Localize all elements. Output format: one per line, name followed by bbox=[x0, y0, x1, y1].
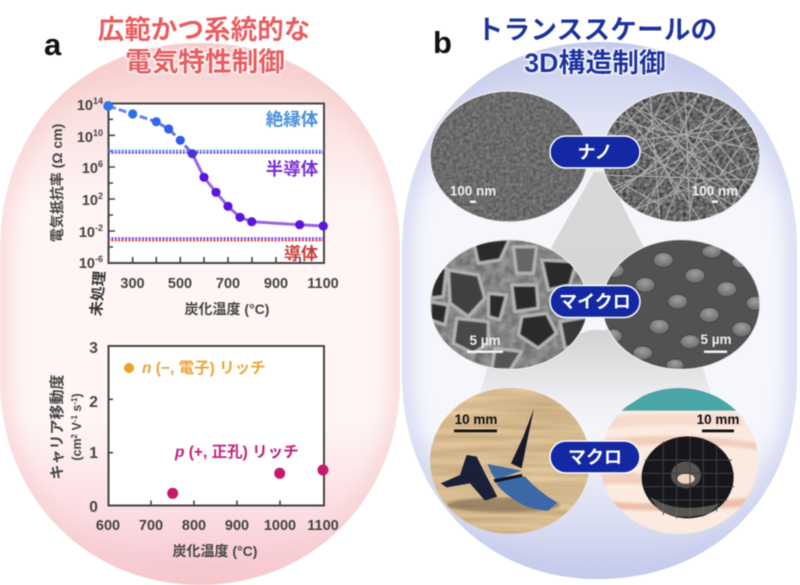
chart: carrier mobility vs carbonization temperature bbox=[48, 340, 339, 559]
x axis title: 炭化温度 (°C) bbox=[185, 301, 269, 317]
x axis tick labels: 800 bbox=[182, 518, 206, 534]
title: panel a: 電気特性制御 bbox=[125, 47, 285, 77]
title: panel b: トランススケールの bbox=[477, 15, 717, 45]
label pill: micro: マイクロ bbox=[559, 292, 631, 312]
label pill: micro bbox=[550, 286, 640, 318]
scale bar bbox=[712, 200, 718, 203]
y axis tick labels: 10 bbox=[77, 130, 93, 146]
y axis tick labels: 10 bbox=[82, 161, 98, 177]
funnel: nano to micro connector bbox=[552, 172, 645, 300]
y axis tick labels: 0 bbox=[89, 499, 98, 516]
data series: resistivity bbox=[103, 101, 328, 231]
image: micro, dimpled surface bbox=[604, 239, 760, 370]
image: micro, porous scaffold bbox=[430, 239, 586, 370]
y axis title: -1 bbox=[70, 397, 79, 405]
data point and legend: n-rich: n (−, 電子) リッチ bbox=[142, 359, 266, 377]
y axis title: -1 bbox=[70, 415, 79, 422]
x axis tick labels bbox=[120, 276, 339, 292]
x axis tick labels: 700 bbox=[216, 276, 240, 292]
x axis tick labels: 1100 bbox=[307, 276, 339, 292]
y axis tick labels: 10 bbox=[82, 193, 98, 209]
y axis title: 電気抵抗率 (Ω cm) bbox=[49, 124, 65, 242]
image: macro, origami crane bbox=[428, 386, 593, 536]
x axis tick labels bbox=[96, 518, 339, 534]
x axis tick labels: 900 bbox=[264, 276, 288, 292]
y axis title bbox=[48, 374, 84, 480]
x axis tick labels: 1000 bbox=[264, 518, 296, 534]
y axis tick labels: 10 bbox=[93, 128, 103, 138]
scale bar bbox=[467, 350, 503, 353]
panel a background: pink rounded shape bbox=[0, 40, 402, 585]
y axis title: V bbox=[70, 422, 84, 434]
y axis tick labels: 10 bbox=[79, 225, 95, 241]
data points and legend: p-rich bbox=[167, 443, 328, 499]
scale label: 10 mm: 10 mm bbox=[697, 412, 739, 427]
y axis tick labels: 10 bbox=[79, 256, 95, 272]
threshold line: semiconductor / conductor bbox=[108, 238, 324, 240]
x tick label: untreated: 未処理 bbox=[87, 270, 109, 317]
panel b background: blue rounded shape bbox=[400, 40, 800, 580]
x axis tick labels: 900 bbox=[225, 518, 249, 534]
label pill: nano bbox=[550, 136, 640, 168]
panel label b: b bbox=[433, 25, 452, 60]
threshold line: insulator / semiconductor bbox=[108, 151, 324, 153]
scale bar bbox=[454, 430, 497, 432]
y axis tick labels: 6 bbox=[98, 159, 103, 169]
image: nano, fibrous network bbox=[603, 90, 760, 222]
scale bar bbox=[704, 350, 727, 353]
image: nano, dense surface bbox=[430, 90, 587, 222]
scale bar bbox=[702, 430, 734, 432]
scale bar bbox=[470, 200, 476, 203]
plot frame and ticks bbox=[108, 346, 324, 506]
label pill: macro bbox=[550, 441, 640, 473]
y axis title: 2 bbox=[70, 433, 79, 438]
x axis title: 炭化温度 (°C) bbox=[173, 543, 257, 559]
data points and legend: p-rich: p (+, 正孔) リッチ bbox=[174, 443, 299, 461]
panel label a: a bbox=[44, 27, 62, 62]
region label: conductor: 導体 bbox=[284, 244, 318, 264]
y axis title: ) bbox=[70, 393, 84, 397]
title: panel a: 広範かつ系統的な bbox=[98, 15, 310, 45]
y axis title: (cm bbox=[70, 438, 84, 461]
y axis tick labels: 2 bbox=[98, 191, 103, 201]
scale label: 10 mm: 10 mm bbox=[455, 412, 497, 427]
label pill: nano: ナノ bbox=[577, 142, 613, 162]
image: macro, carbon ring on fingers bbox=[598, 386, 760, 536]
x axis tick labels: 500 bbox=[168, 276, 192, 292]
y axis tick labels: 14 bbox=[93, 96, 103, 106]
title: panel a bbox=[98, 15, 310, 77]
scale label: 5 µm: 5 µm bbox=[469, 333, 501, 348]
region label: semiconductor: 半導体 bbox=[266, 159, 319, 179]
y axis title: s bbox=[70, 405, 84, 415]
scale label: 5 µm: 5 µm bbox=[700, 332, 732, 347]
x axis tick labels: 700 bbox=[139, 518, 163, 534]
y axis tick labels: -6 bbox=[95, 254, 103, 264]
y axis tick labels: 2 bbox=[89, 394, 98, 411]
title: panel b bbox=[477, 15, 717, 78]
y axis tick labels: 1 bbox=[89, 445, 98, 462]
x axis tick labels: 1100 bbox=[307, 518, 339, 534]
y axis tick labels: 3 bbox=[89, 340, 98, 357]
x axis tick labels: 300 bbox=[120, 276, 145, 292]
title: panel b: 3D構造制御 bbox=[524, 48, 666, 78]
y axis tick labels: -2 bbox=[95, 223, 103, 233]
region label: insulator: 絶縁体 bbox=[266, 110, 319, 130]
x axis tick labels: 600 bbox=[96, 518, 120, 534]
y axis tick labels bbox=[77, 96, 103, 272]
funnel: micro to macro connector bbox=[470, 330, 722, 450]
y axis tick labels: 10 bbox=[77, 98, 93, 114]
y axis tick labels bbox=[89, 340, 98, 516]
scale label: 100 nm: 100 nm bbox=[692, 184, 738, 198]
scale label: 100 nm: 100 nm bbox=[450, 184, 496, 198]
y axis title: キャリア移動度 bbox=[48, 374, 66, 480]
plot frame and ticks bbox=[108, 104, 324, 263]
chart: resistivity vs carbonization temperature bbox=[49, 96, 339, 317]
label pill: macro: マクロ bbox=[568, 448, 622, 468]
